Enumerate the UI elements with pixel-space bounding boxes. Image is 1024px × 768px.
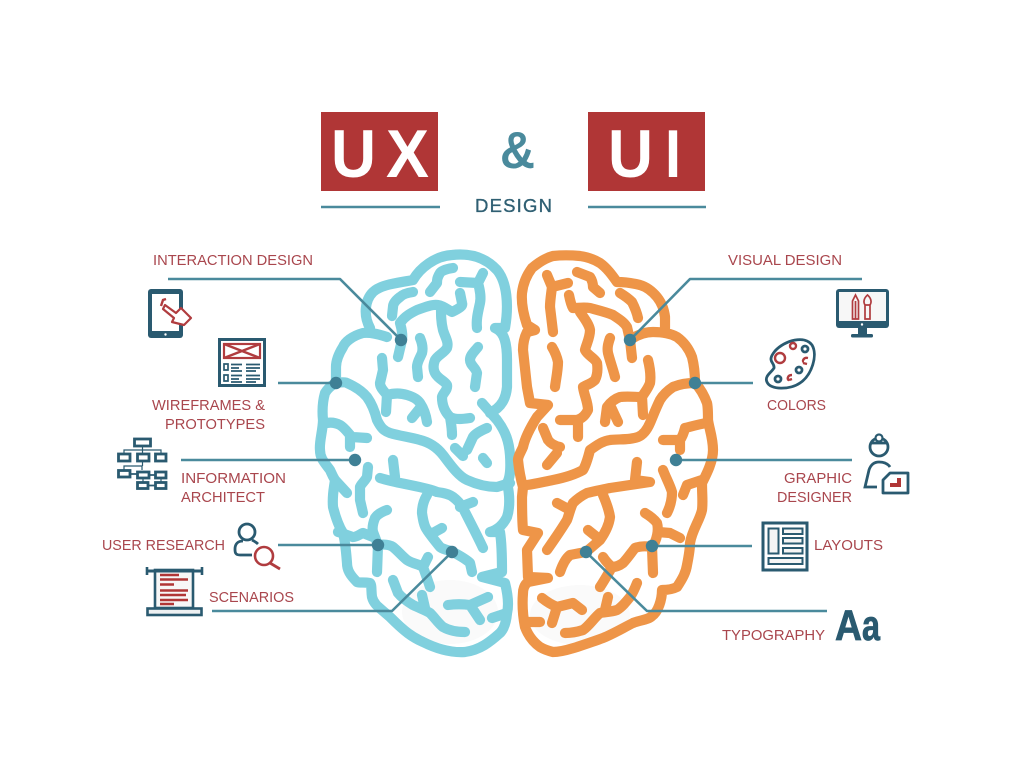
UX badge [321, 112, 438, 192]
icon: wireframe [220, 340, 264, 386]
title block [321, 112, 706, 216]
icon: tablet with hand [148, 289, 191, 338]
UI badge: I [665, 116, 681, 192]
label: graphic designer: GRAPHIC [784, 470, 852, 487]
connector: information architect [181, 454, 361, 466]
UX badge: U [331, 116, 376, 192]
UX badge: X [386, 116, 429, 192]
connector: layouts [646, 540, 752, 552]
connector: visual design [624, 279, 862, 346]
right brain hemisphere (UI) [518, 255, 713, 652]
design subtitle: DESIGN [475, 195, 552, 216]
label: information architect: INFORMATION [181, 470, 286, 487]
icon: graphic designer [865, 434, 908, 493]
connector: user research [278, 539, 384, 551]
icon: user research magnifier [235, 524, 280, 569]
icon: scenario scroll [147, 567, 202, 615]
UI badge [588, 112, 705, 192]
icon: sitemap [118, 439, 166, 488]
icon: typography Aa [835, 602, 881, 650]
label: typography: TYPOGRAPHY [722, 627, 825, 644]
icon: typography Aa: A [835, 602, 862, 650]
connector: scenarios [212, 546, 458, 611]
left brain hemisphere (UX) [320, 255, 510, 652]
label: colors: COLORS [767, 397, 826, 414]
label: information architect: ARCHITECT [181, 489, 265, 506]
label: information architect [181, 470, 286, 506]
label: interaction design: INTERACTION DESIGN [153, 252, 313, 269]
label: wireframes and prototypes: WIREFRAMES & [152, 397, 265, 414]
icon: color palette [766, 340, 814, 388]
connector: typography [580, 546, 827, 611]
label: layouts: LAYOUTS [814, 537, 883, 554]
label: graphic designer [777, 470, 852, 506]
connector: graphic designer [670, 454, 852, 466]
label: visual design: VISUAL DESIGN [728, 252, 842, 269]
label: user research: USER RESEARCH [102, 537, 225, 554]
label: wireframes and prototypes [152, 397, 265, 433]
connector: wireframes [278, 377, 342, 389]
UI badge: U [608, 116, 653, 192]
ampersand: & [500, 122, 535, 180]
icon: typography Aa: a [862, 602, 881, 650]
connector: colors [689, 377, 753, 389]
label: wireframes and prototypes: PROTOTYPES [165, 416, 265, 433]
icon: monitor with tools [836, 289, 889, 338]
label: scenarios: SCENARIOS [209, 589, 294, 606]
connector: interaction design [168, 279, 407, 346]
label: graphic designer: DESIGNER [777, 489, 852, 506]
icon: layout [763, 523, 807, 570]
